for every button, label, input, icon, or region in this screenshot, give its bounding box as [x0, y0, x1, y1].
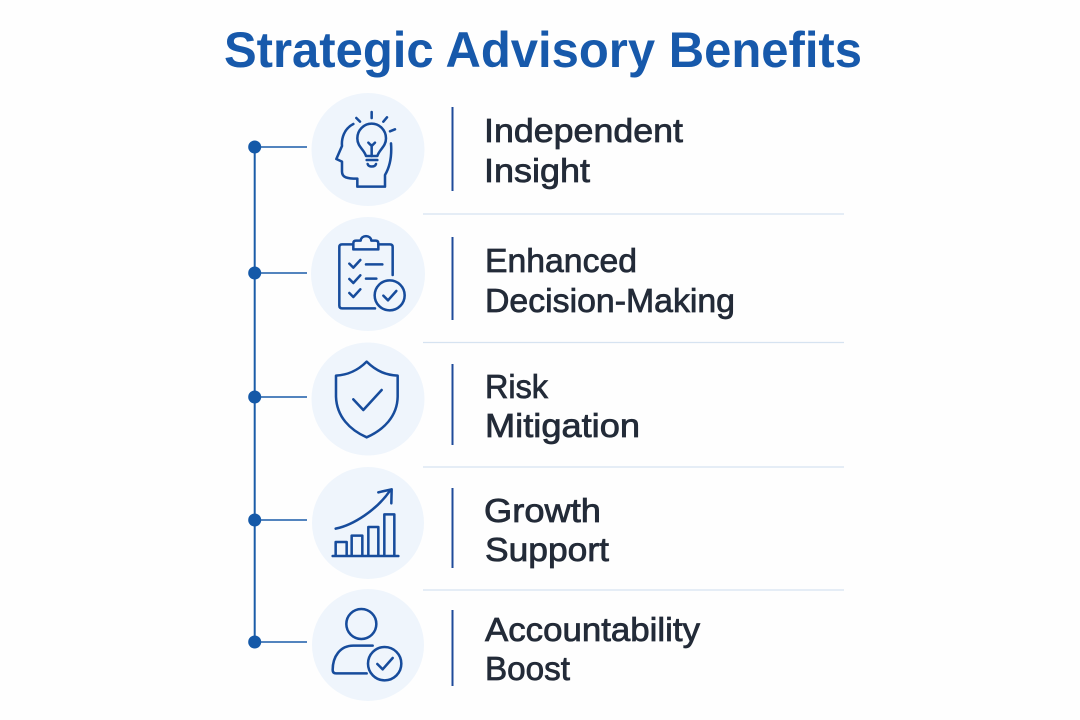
icon: head with lightbulb: [336, 112, 395, 187]
label: Risk Mitigation: Risk: [485, 368, 548, 405]
benefit row: Risk Mitigation: [312, 342, 640, 456]
benefit row: Enhanced Decision-Making: [311, 217, 735, 331]
label: Accountability Boost: Boost: [485, 650, 570, 687]
benefit row: Independent Insight: [312, 93, 683, 206]
label: Accountability Boost: [485, 611, 701, 687]
benefit row: Accountability Boost: [312, 589, 701, 701]
label: Growth Support: Support: [485, 531, 609, 568]
label: Accountability Boost: Accountability: [485, 611, 701, 648]
label: Independent Insight: [484, 112, 683, 189]
icon: rising bar chart with arrow: [333, 489, 398, 556]
label: Enhanced Decision-Making: [485, 242, 735, 319]
label: Growth Support: Growth: [484, 492, 601, 529]
label: Risk Mitigation: Mitigation: [485, 407, 640, 444]
icon: person with check badge: [333, 609, 401, 680]
icon: shield with check: [336, 362, 398, 437]
label: Independent Insight: Insight: [484, 152, 590, 189]
label: Enhanced Decision-Making: Decision-Making: [485, 282, 735, 319]
icon: clipboard with check badge: [339, 236, 405, 310]
timeline connector: [248, 140, 307, 648]
label: Independent Insight: Independent: [484, 112, 683, 149]
label: Risk Mitigation: [485, 368, 640, 444]
benefit row: Growth Support: [312, 467, 609, 579]
label: Enhanced Decision-Making: Enhanced: [485, 242, 637, 279]
title: Strategic Advisory Benefits: [224, 22, 862, 78]
label: Growth Support: [484, 492, 609, 568]
